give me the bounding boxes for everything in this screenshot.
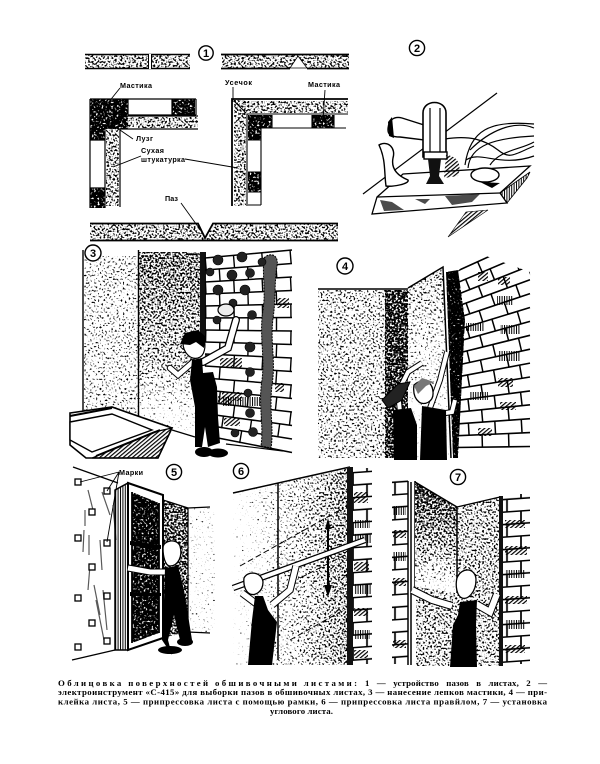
- wall sheets: [318, 289, 409, 458]
- panel 2: electric tool: [363, 40, 534, 237]
- double arrow: [324, 518, 332, 597]
- label: Мастика right: Мастика: [308, 80, 341, 89]
- corner strip: [408, 481, 415, 665]
- right wall: [416, 496, 503, 666]
- label: Мастика right: [308, 80, 341, 120]
- label: Марки: [80, 468, 143, 542]
- mastic dabs: [206, 252, 266, 437]
- two workers: [382, 352, 455, 460]
- left bricks: [392, 477, 408, 664]
- panel 3: applying mastic dabs: [70, 245, 292, 458]
- sheet with v-groove: [221, 54, 349, 68]
- label: Усечок: [225, 78, 252, 102]
- number 6: [233, 463, 249, 479]
- mastic box: [70, 407, 172, 458]
- number 3: 3: [90, 248, 96, 260]
- caption: [58, 678, 548, 716]
- mastic ball in hand: [218, 304, 234, 316]
- sheet with corner groove: [90, 223, 338, 240]
- wires: [445, 123, 534, 168]
- number 4: [337, 258, 353, 274]
- number 2: 2: [414, 43, 420, 55]
- number 7: 7: [455, 472, 461, 484]
- worker: [412, 570, 497, 667]
- label: Лузг: [120, 130, 153, 143]
- brick wall: [205, 250, 292, 452]
- number 4: 4: [342, 261, 349, 273]
- corner sheet: [415, 482, 457, 593]
- number 1: 1: [203, 48, 209, 60]
- panel 1: joint diagrams: [85, 46, 349, 240]
- panel 7: corner sheet: [392, 469, 530, 667]
- mastic stripe: [261, 255, 277, 448]
- outer corner section: [232, 99, 348, 206]
- pressing frame: [115, 483, 163, 650]
- label: Марки: Марки: [119, 468, 143, 477]
- grinder body: [388, 102, 460, 184]
- inner corner section: [90, 99, 198, 208]
- glued sheet: [408, 267, 452, 458]
- right knob: [471, 168, 500, 188]
- number 5: [166, 464, 182, 480]
- number 5: 5: [171, 467, 177, 479]
- wall outline: [72, 467, 118, 660]
- right bricks: [503, 494, 530, 664]
- number 2: [409, 40, 425, 56]
- board: [372, 166, 530, 214]
- label: Паз: [165, 194, 204, 235]
- label: Сухая штукатурка: [113, 146, 238, 168]
- rule: [233, 540, 365, 588]
- mastic strip: [446, 270, 465, 458]
- wall shading: [83, 490, 116, 640]
- label: Сухая штукатурка: Сухая: [141, 146, 164, 155]
- label: Сухая штукатурка: штукатурка: [141, 155, 186, 164]
- left knob: [379, 143, 408, 186]
- label: Усечок: Усечок: [225, 78, 252, 87]
- caption: электроинструмент «С-415» для выборки пазов в обшивочных листах, 3 — нанесение лепков мастики, 4 — при-: [58, 687, 547, 697]
- lumps: marks: [75, 479, 110, 650]
- wall sheets: [83, 250, 206, 434]
- guide line: [363, 93, 497, 194]
- worker: [170, 320, 236, 458]
- caption: 1 — устройство пазов в листах, 2 —: [365, 678, 547, 688]
- adjacent walls: [163, 500, 215, 638]
- worker: [128, 541, 193, 655]
- label: Мастика left: Мастика: [120, 81, 153, 90]
- wedge under board: [448, 210, 488, 237]
- label: Лузг: Лузг: [136, 134, 153, 143]
- panel 6: pressing with rule: [233, 463, 372, 665]
- brick wall: [353, 468, 372, 664]
- label: Мастика left: [108, 81, 153, 103]
- caption: углового листа.: [270, 706, 333, 716]
- caption: Облицовка поверхностей обшивочными листами:: [58, 678, 357, 688]
- number 7: [450, 469, 466, 485]
- worker: [242, 566, 296, 665]
- number 1: [199, 46, 213, 60]
- caption: клейка листа, 5 — припрессовка листа с помощью рамки, 6 — припрессовка листа правйлом, 7 — установка: [58, 696, 548, 706]
- floor line: [172, 430, 283, 451]
- wall: [233, 467, 353, 665]
- panel 4: gluing sheet: [318, 238, 530, 460]
- brick wall: [455, 238, 530, 448]
- panel 5: pressing with frame: [72, 464, 215, 660]
- label: Паз: Паз: [165, 194, 178, 203]
- number 6: 6: [238, 466, 244, 478]
- sheet with saw-cut joint: [85, 54, 190, 69]
- number 3: [85, 245, 101, 261]
